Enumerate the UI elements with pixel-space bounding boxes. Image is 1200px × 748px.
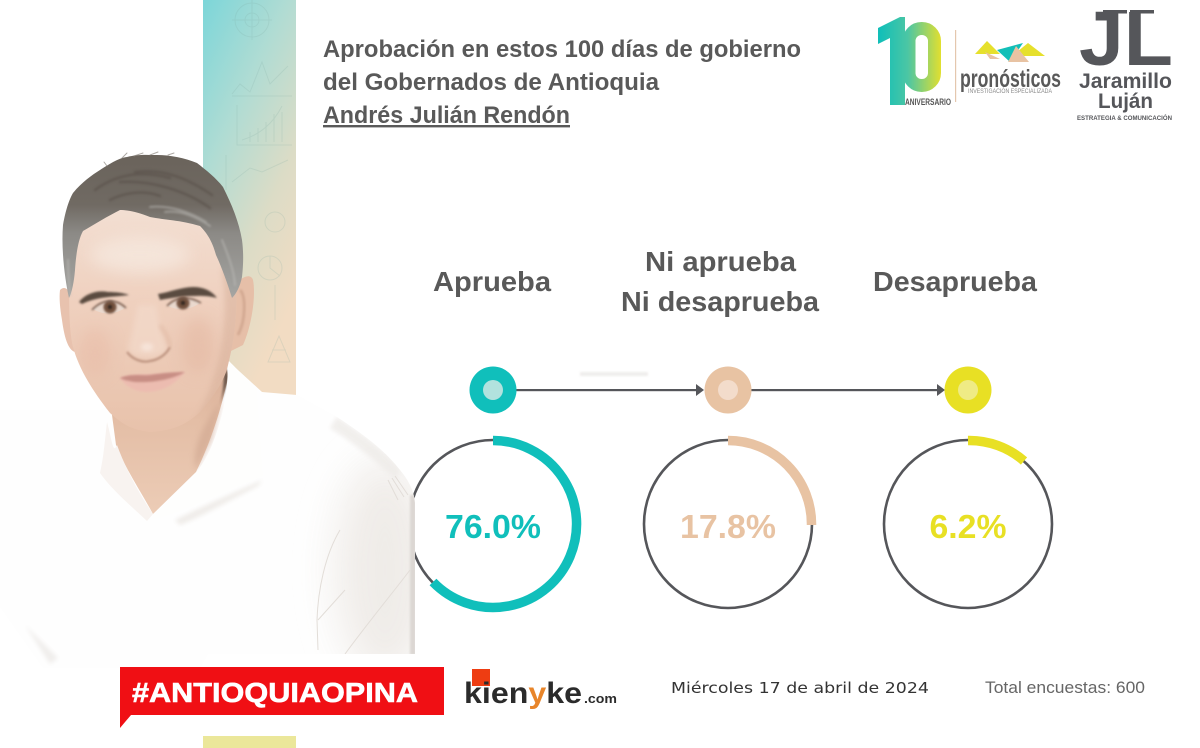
logo: Jaramillo Lujan: Luján [1098,90,1153,113]
ears [60,288,78,352]
logo: Jaramillo Lujan [1077,0,1173,122]
arrow: ni aprueba to desaprueba [751,384,945,396]
gauge: 6.2% [884,440,1052,608]
hair texture [68,152,235,295]
gauge: 17.8% [644,440,812,608]
answer heading: Aprueba: Aprueba [433,266,551,297]
title: Andrés Julián Rendón [323,102,570,129]
logo: pronosticos [955,30,1061,102]
node: yellow [944,366,992,414]
kienyke logo: kienyke [464,677,582,710]
title: del Gobernados de Antioquia [323,69,660,96]
small yellow strip at the bottom [203,736,296,748]
gauge: 17.8%: 17.8% [680,508,776,545]
portrait of the governor [32,152,415,662]
kienyke logo: .com [584,691,617,706]
answer heading: Ni aprueba Ni desaprueba: Ni aprueba [645,246,796,277]
faint smudge [580,372,648,376]
logo: 10 aniversario: ANIVERSARIO [905,97,951,107]
answer heading: Ni aprueba Ni desaprueba: Ni desaprueba [621,286,819,317]
answer heading: Ni aprueba Ni desaprueba [621,246,819,317]
title [323,36,801,129]
eyebrows [79,287,217,304]
logo: 10 aniversario [878,17,951,107]
nose [127,305,170,362]
neck [112,360,228,514]
logo: Jaramillo Lujan: ESTRATEGIA & COMUNICACIÓN [1077,114,1172,122]
arrow: aprueba to ni aprueba [516,384,704,396]
mouth [120,372,185,392]
logo: Jaramillo Lujan: Jaramillo [1079,70,1172,93]
gauge: 6.2%: 6.2% [930,508,1006,545]
gauge: 76.0% [409,440,577,608]
facial shading [88,238,236,406]
decorative gradient strip [203,0,296,396]
logo: pronosticos: pronósticos [960,65,1061,93]
hair [62,155,243,298]
hashtag banner [120,667,444,728]
hashtag banner: #ANTIOQUIAOPINA [132,677,418,708]
node: tan [704,366,752,414]
date: Miércoles 17 de abril de 2024 [671,679,929,697]
node: teal [470,366,516,414]
collar: left [100,422,153,521]
collar: right [153,360,263,520]
face [69,200,236,432]
logo: pronosticos: INVESTIGACIÓN ESPECIALIZADA [968,86,1053,95]
kienyke logo [464,669,617,710]
shirt [0,360,415,668]
shirt shading and folds [25,417,435,680]
gauge: 76.0%: 76.0% [445,508,541,545]
eyes [92,296,201,314]
title: Aprobación en estos 100 días de gobierno [323,36,801,63]
answer heading: Desaprueba: Desaprueba [873,266,1037,297]
total surveys: Total encuestas: 600 [985,678,1145,697]
